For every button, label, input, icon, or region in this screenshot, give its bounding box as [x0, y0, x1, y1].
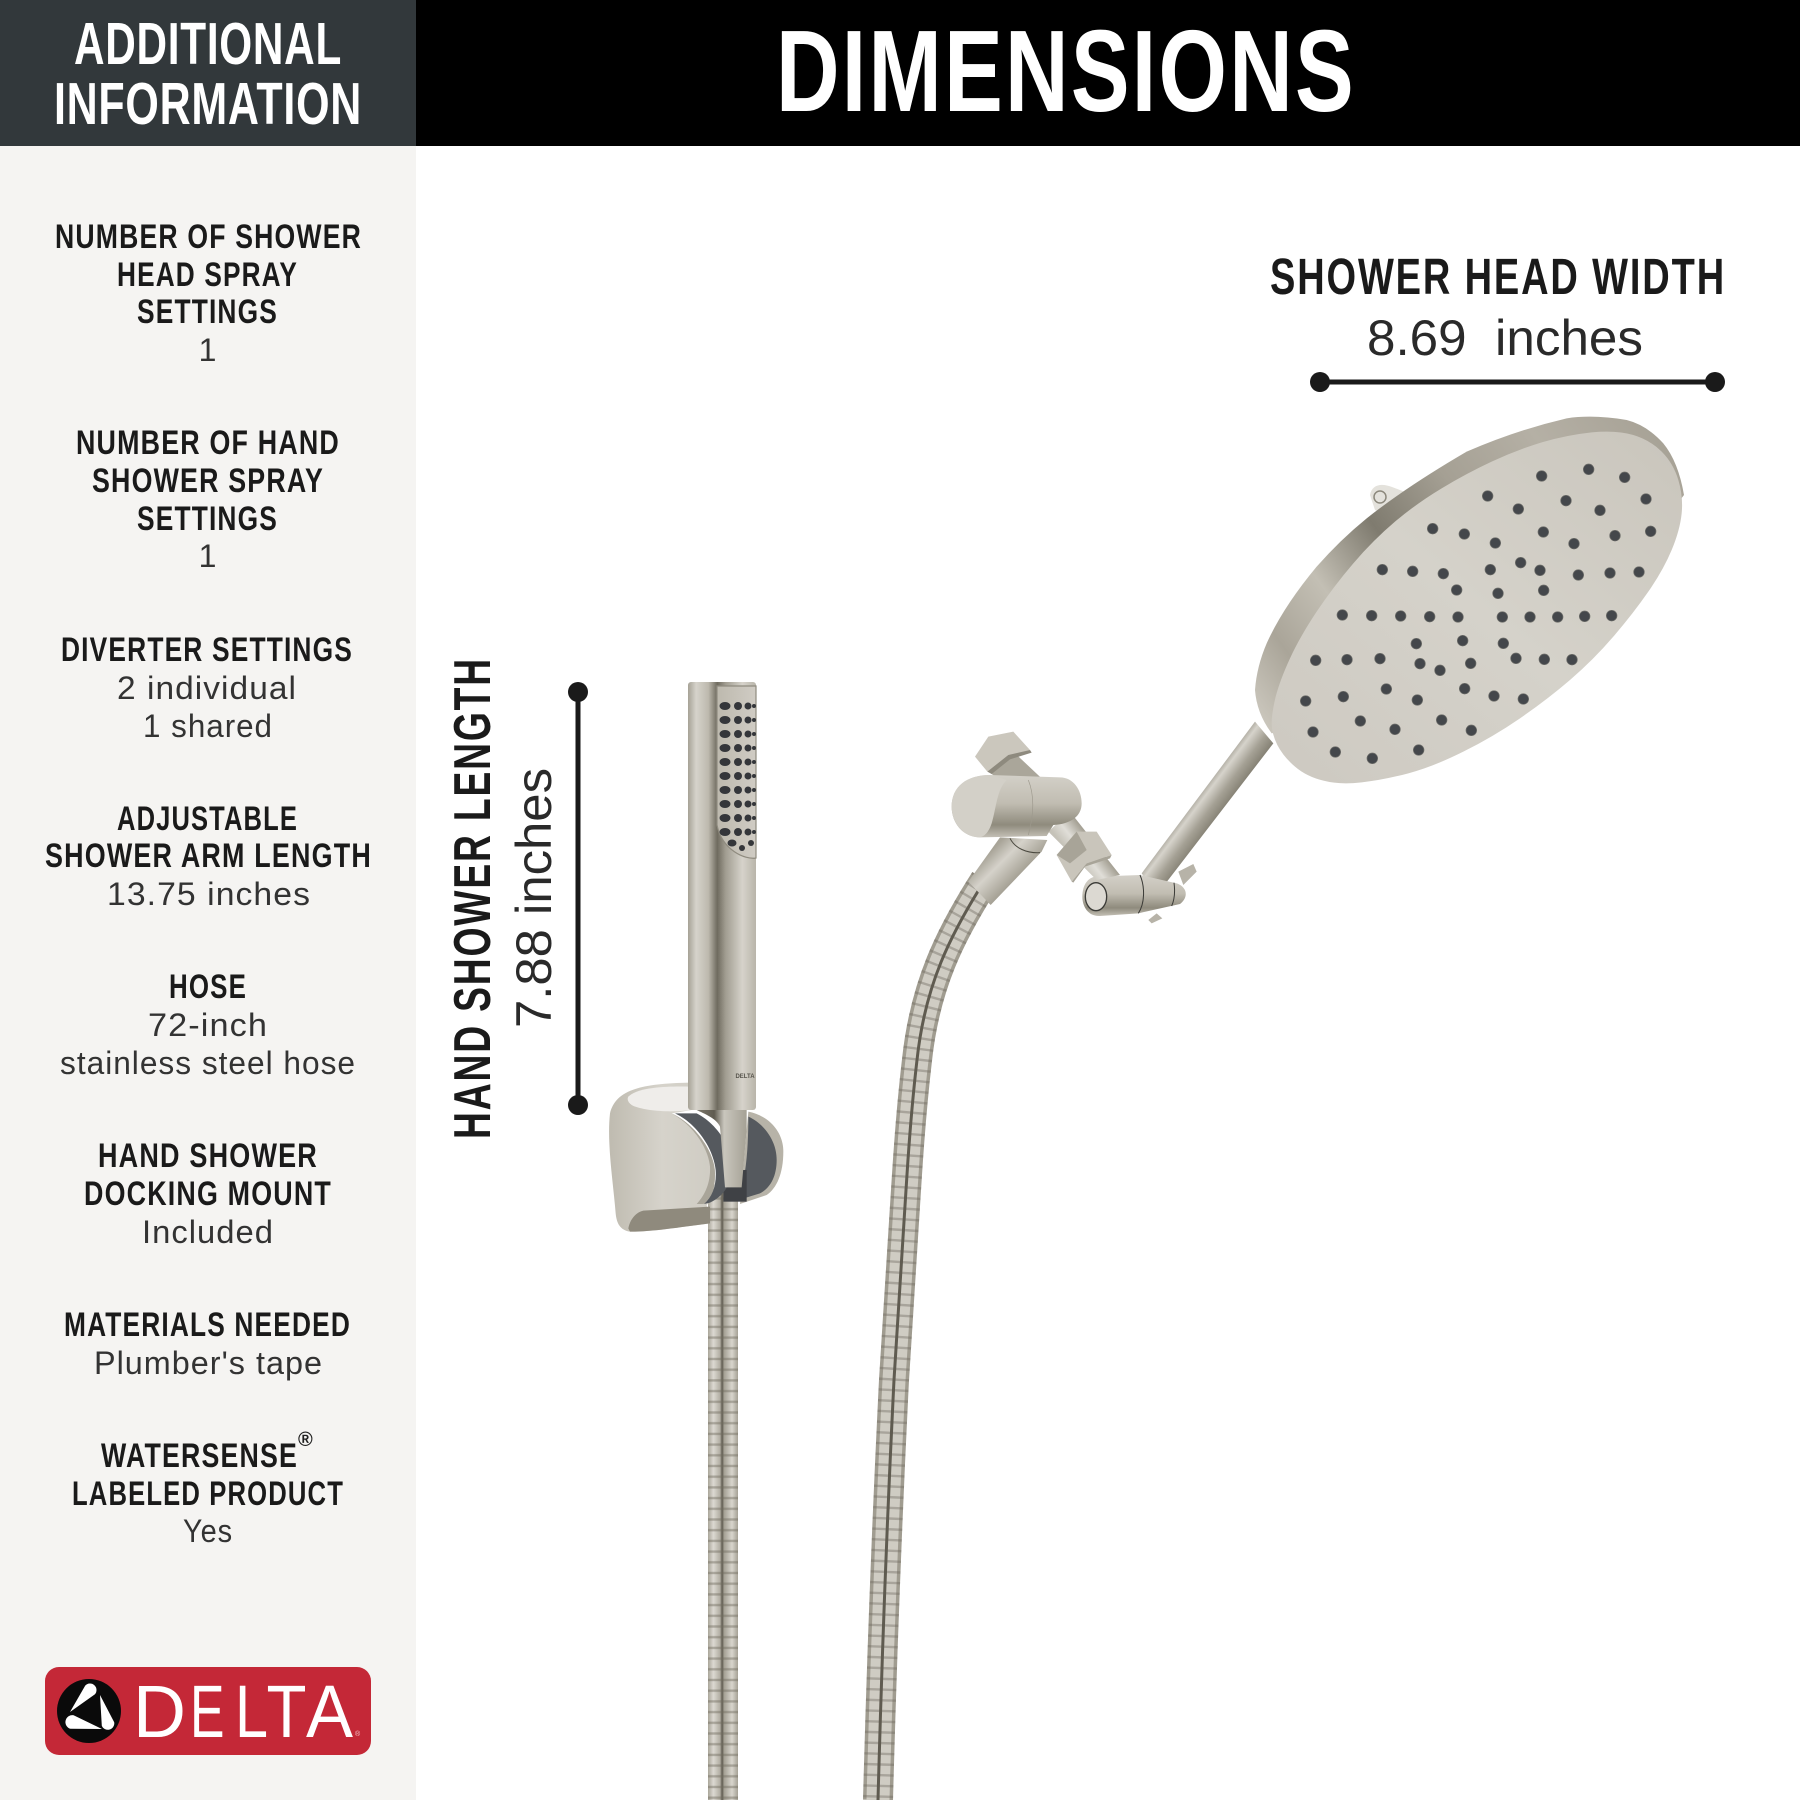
spec: hand shower docking mount — [84, 1137, 332, 1250]
dock body — [609, 1083, 715, 1232]
dock right cradle — [740, 1112, 783, 1204]
spec: watersense labeled product: ® — [298, 1429, 313, 1451]
spec: watersense labeled product: LABELED PRODUCT — [72, 1475, 344, 1513]
dimension line: hand shower length — [568, 682, 588, 1115]
handle — [688, 682, 756, 1110]
adjustable arm and diverter — [952, 722, 1273, 923]
spec: number of shower head spray settings: NUMBER OF SHOWER — [55, 218, 362, 256]
arm tube to shower head — [1142, 722, 1273, 895]
spec: hose — [60, 968, 356, 1081]
spray nozzles — [1300, 464, 1656, 764]
logo: delta: T — [266, 1670, 306, 1753]
logo: delta: E — [190, 1670, 224, 1753]
spec: number of hand shower spray settings: 1 — [199, 538, 217, 574]
spec: number of hand shower spray settings: SETTINGS — [137, 500, 278, 538]
label: shower head width: 8.69 inches — [1367, 310, 1643, 366]
spray face — [717, 686, 756, 858]
spec: materials needed: MATERIALS NEEDED — [64, 1306, 351, 1344]
dock dark band — [675, 1113, 732, 1204]
label: shower head width — [1270, 248, 1726, 366]
spec: diverter settings: 2 individual — [117, 670, 297, 706]
spec: watersense labeled product: WATERSENSE — [101, 1437, 298, 1475]
head face — [1272, 432, 1682, 783]
header: additional information — [0, 0, 416, 146]
spec: materials needed: Plumber's tape — [94, 1345, 323, 1381]
top hex nut — [975, 732, 1032, 774]
hose from hand shower mount — [708, 1190, 738, 1800]
header: additional information: INFORMATION — [54, 71, 362, 137]
logo: delta: L — [235, 1670, 268, 1753]
logo: delta: ® — [355, 1730, 361, 1738]
spec: number of shower head spray settings — [55, 218, 362, 368]
mount lug — [1370, 485, 1405, 515]
spec: number of hand shower spray settings: SHOWER SPRAY — [92, 462, 324, 500]
spec: number of hand shower spray settings: NUMBER OF HAND — [76, 424, 340, 462]
header: dimensions title: DIMENSIONS — [776, 6, 1356, 136]
logo: delta — [45, 1667, 371, 1755]
elbow joint — [1082, 875, 1186, 916]
hose from shower arm diverter — [878, 880, 985, 1800]
dock shadow behind neck — [723, 1170, 747, 1202]
spec: hose: stainless steel hose — [60, 1045, 356, 1081]
dock lower lip — [628, 1207, 710, 1232]
spec: hand shower docking mount: Included — [142, 1214, 274, 1250]
dock silver rim — [672, 1113, 715, 1204]
hand shower — [609, 682, 783, 1232]
brand mark on handle: DELTA — [735, 1074, 755, 1080]
spec: number of shower head spray settings: SETTINGS — [137, 293, 278, 331]
spec: adjustable shower arm length: 13.75 inches — [107, 876, 311, 912]
spec: number of shower head spray settings: HEAD SPRAY — [117, 256, 298, 294]
spec: adjustable shower arm length — [45, 800, 372, 912]
clamp tabs — [1148, 864, 1197, 923]
header: dimensions title — [416, 0, 1800, 146]
spec: number of hand shower spray settings — [76, 424, 340, 574]
spec: diverter settings: DIVERTER SETTINGS — [61, 631, 353, 669]
spec: hand shower docking mount: DOCKING MOUNT — [84, 1175, 332, 1213]
spec: hand shower docking mount: HAND SHOWER — [98, 1137, 318, 1175]
spec: watersense labeled product — [72, 1429, 344, 1549]
spec: hose: 72-inch — [148, 1007, 268, 1043]
dimension line: shower head width — [1310, 372, 1725, 392]
shower head — [1255, 417, 1684, 783]
spec: diverter settings — [61, 631, 353, 744]
spec: watersense labeled product: Yes — [183, 1513, 233, 1549]
diverter body — [952, 775, 1082, 837]
panel: additional information sidebar — [0, 146, 416, 1800]
hand shower neck — [697, 1110, 747, 1187]
header: additional information: ADDITIONAL — [74, 11, 342, 77]
top neck — [988, 753, 1042, 780]
spec: number of shower head spray settings: 1 — [199, 332, 217, 368]
spec: hose: HOSE — [169, 968, 247, 1006]
spec: materials needed — [64, 1306, 351, 1381]
spec: diverter settings: 1 shared — [143, 708, 273, 744]
head rim — [1255, 417, 1684, 733]
label: hand shower length — [444, 657, 562, 1139]
spray nozzles — [720, 702, 756, 851]
logo: delta: D — [133, 1670, 186, 1753]
hose collar — [968, 837, 1047, 905]
hex nut — [1057, 832, 1112, 883]
logo: delta: A — [306, 1670, 354, 1753]
spec: adjustable shower arm length: ADJUSTABLE — [117, 800, 298, 838]
dock mount — [609, 1083, 783, 1232]
dock top highlight — [628, 1087, 691, 1111]
label: hand shower length: 7.88 inches — [506, 768, 562, 1028]
spec: adjustable shower arm length: SHOWER ARM LENGTH — [45, 837, 372, 875]
swivel neck — [1048, 812, 1120, 880]
label: hand shower length: HAND SHOWER LENGTH — [444, 657, 502, 1139]
